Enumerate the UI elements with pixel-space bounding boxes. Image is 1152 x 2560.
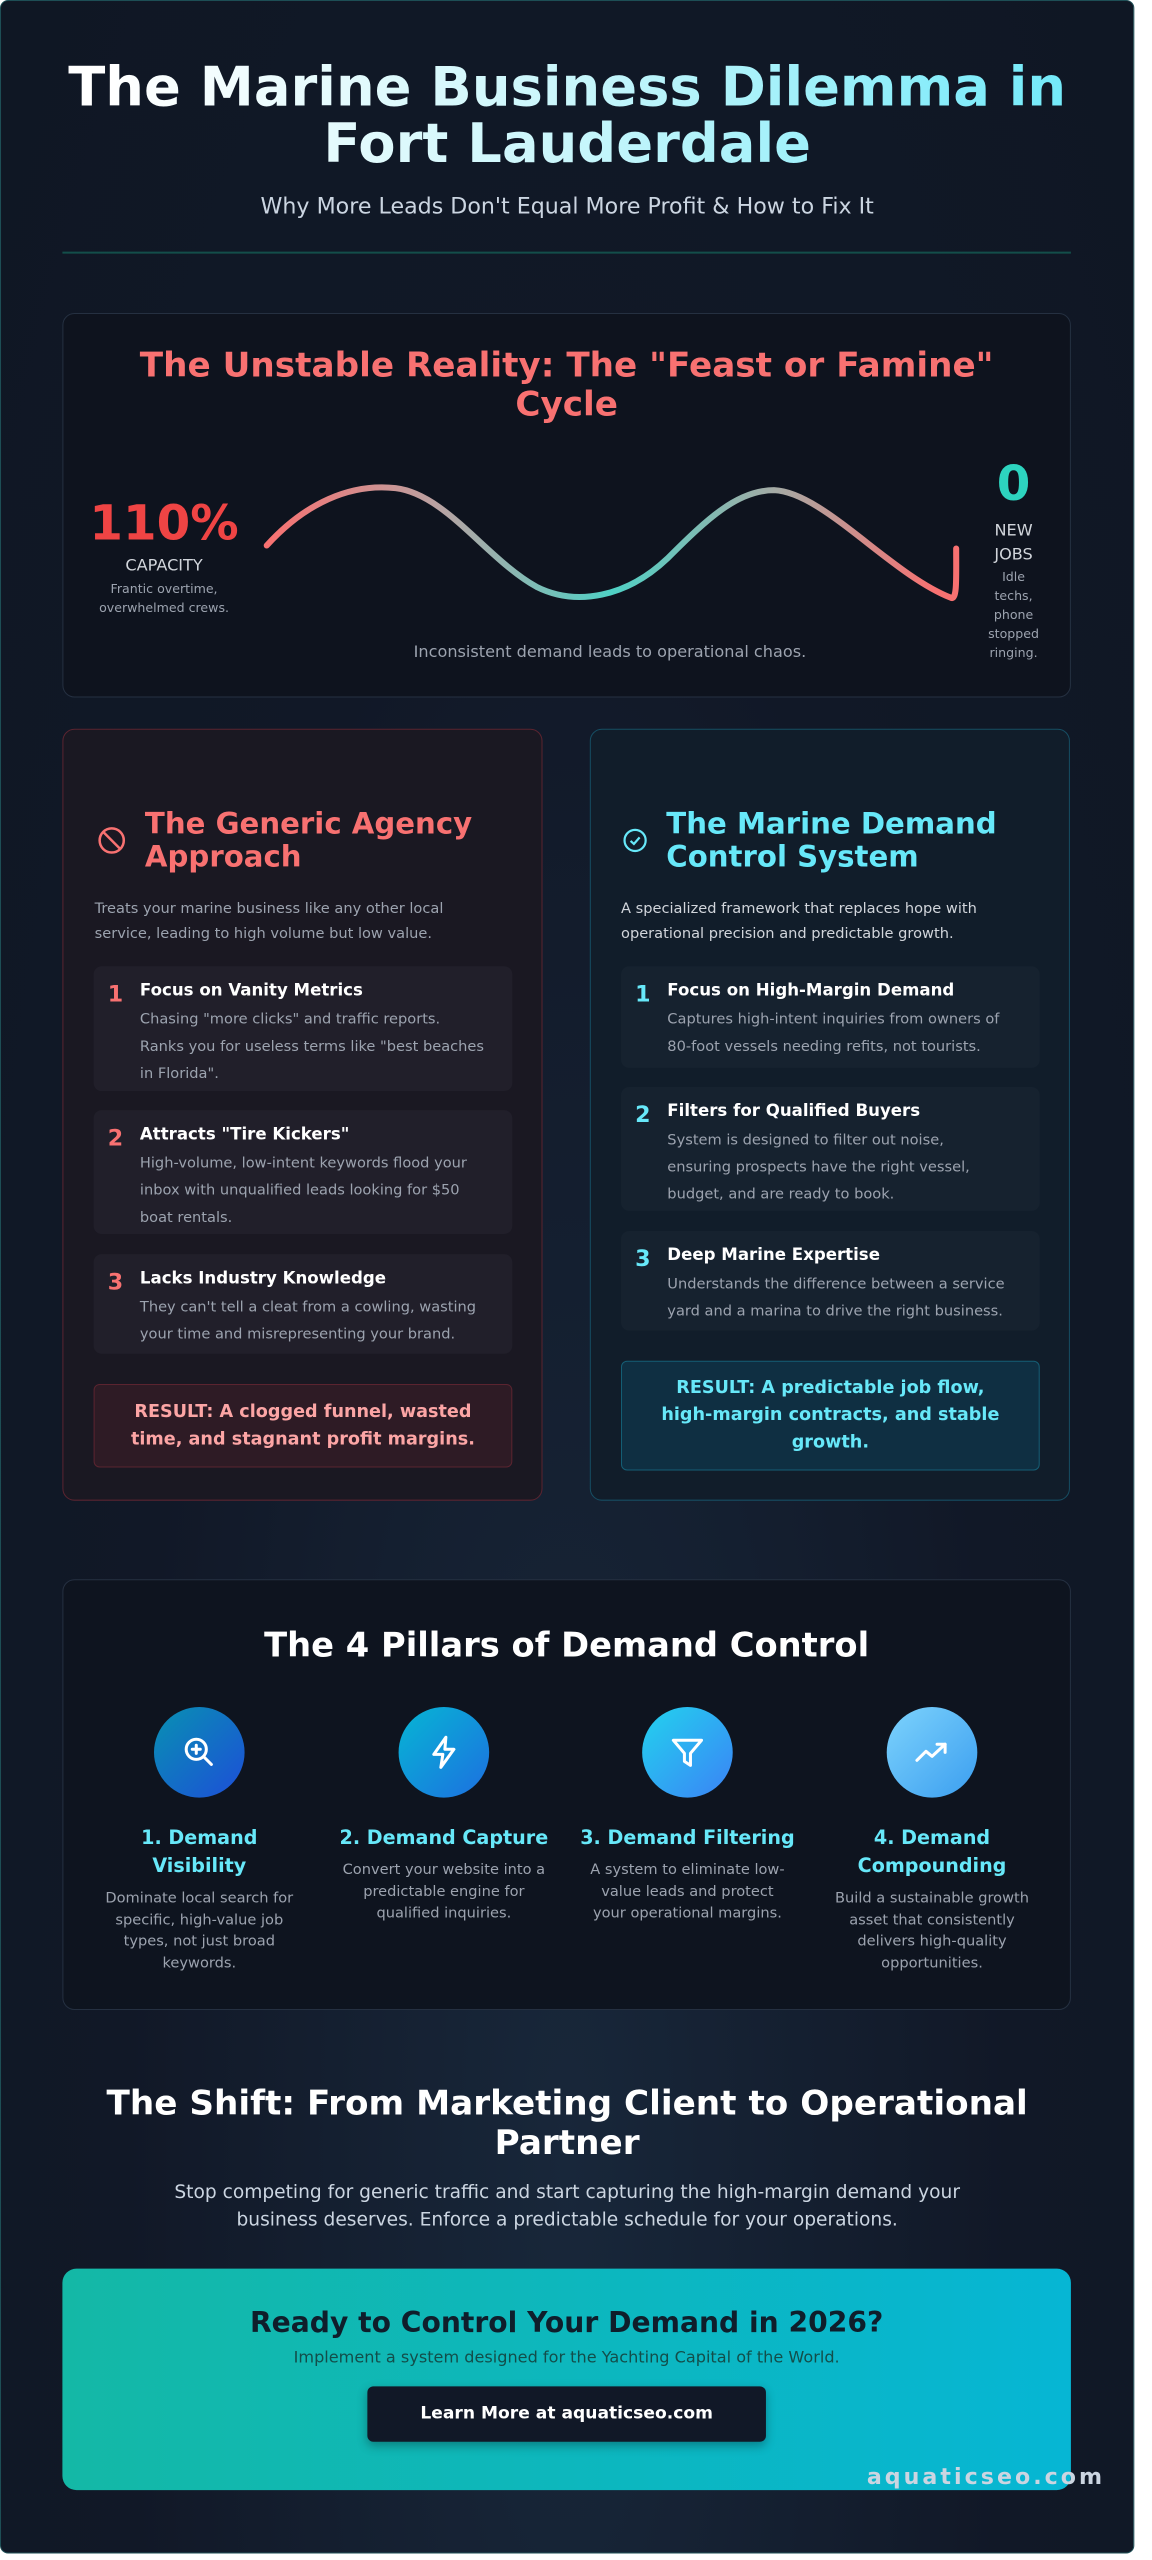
CTA heading: Ready to Control Your Demand in 2026? [250, 2306, 883, 2339]
stat: 0 new jobs: phone [994, 607, 1033, 622]
stat: 0 new jobs: Idle [1002, 569, 1025, 584]
panel: feast or famine [62, 313, 1071, 698]
item 3: Understands the difference between a service yard and a marina to drive the right business. [667, 1276, 1005, 1320]
panel: generic agency [62, 729, 543, 1501]
item 1: 1 [108, 982, 123, 1008]
item 1: 1 [635, 982, 651, 1008]
item 1: Focus on High-Margin Demand [667, 980, 954, 999]
item 3: Deep Marine Expertise [667, 1245, 880, 1264]
item 3 [94, 1254, 512, 1354]
pillar 4: 4. Demand [874, 1827, 990, 1849]
icon: trend [887, 1707, 977, 1798]
item 3: Lacks Industry Knowledge [140, 1268, 386, 1287]
stat: 110%: 110% [89, 495, 239, 552]
heading: Approach [145, 839, 302, 874]
item 1: Chasing "more clicks" and traffic reports. Ranks you for useless terms like "best beaches in Florida". [140, 1012, 484, 1082]
item 2: Attracts "Tire Kickers" [140, 1124, 349, 1143]
icon: ban [98, 827, 126, 854]
stat: 0 new jobs: techs, [994, 588, 1033, 603]
title [0, 59, 1134, 172]
heading [145, 806, 472, 874]
item 2: High-volume, low-intent keywords flood your inbox with unqualified leads looking for $50 boat rentals. [140, 1155, 467, 1226]
stat: 110%: CAPACITY [125, 556, 203, 575]
result [621, 1361, 1040, 1470]
pillar 2 [340, 1707, 548, 1921]
item 2: Filters for Qualified Buyers [667, 1101, 920, 1120]
item 3: 3 [635, 1247, 651, 1272]
icon: check [623, 828, 647, 852]
heading: The Unstable Reality: The "Feast or Famine" Cycle [140, 345, 993, 425]
stat: 110%: Frantic overtime, [111, 581, 218, 596]
pillar 3 [580, 1707, 795, 1921]
item 3: 3 [108, 1270, 123, 1295]
item 1 [621, 966, 1040, 1068]
heading: The Generic Agency [145, 806, 472, 840]
item 3 [621, 1231, 1040, 1331]
heading: The 4 Pillars of Demand Control [264, 1625, 869, 1665]
item 1: Focus on Vanity Metrics [140, 980, 363, 999]
subtitle: Why More Leads Don't Equal More Profit & How to Fix It [260, 194, 874, 219]
stat: 0 new jobs: JOBS [994, 545, 1033, 564]
CTA button: Learn More at aquaticseo.com [420, 2404, 713, 2424]
pillar 1: Visibility [152, 1855, 246, 1877]
heading [666, 806, 997, 874]
stat: 0 new jobs: stopped [988, 626, 1039, 641]
shift heading: The Shift: From Marketing Client to Operational Partner [107, 2083, 1028, 2163]
heading: The Marine Demand [666, 806, 997, 840]
panel: 4 pillars [62, 1579, 1071, 2010]
icon: bolt [399, 1707, 489, 1798]
item 2: 2 [635, 1103, 651, 1128]
CTA box [62, 2269, 1071, 2490]
result: RESULT: A predictable job flow, high-margin contracts, and stable growth. [661, 1378, 999, 1452]
heading: Control System [666, 839, 919, 874]
CTA sub: Implement a system designed for the Yachting Capital of the World. [294, 2347, 840, 2366]
pillar 4 [835, 1707, 1029, 1971]
pillar 4: Build a sustainable growth asset that consistently delivers high-quality opportunities. [835, 1890, 1029, 1971]
icon: search [154, 1707, 245, 1798]
pillar 3: 3. Demand Filtering [580, 1827, 795, 1849]
footer brand: aquaticseo.com [867, 2465, 1105, 2490]
icon: funnel [642, 1707, 733, 1798]
item 2: System is designed to filter out noise, ensuring prospects have the right vessel, budget, and are ready to book. [667, 1132, 970, 1203]
panel: marine demand control [590, 729, 1070, 1501]
description: A specialized framework that replaces hope with operational precision and predictable growth. [621, 901, 977, 942]
item 1: Captures high-intent inquiries from owners of 80-foot vessels needing refits, not tourists. [667, 1012, 999, 1055]
item 3: They can't tell a cleat from a cowling, wasting your time and misrepresenting your brand. [140, 1299, 476, 1343]
stat: 110% [89, 495, 239, 615]
stat: 0 new jobs: NEW [994, 520, 1033, 539]
pillar 2: Convert your website into a predictable engine for qualified inquiries. [343, 1862, 545, 1921]
caption: Inconsistent demand leads to operational chaos. [414, 642, 806, 661]
stat: 0 new jobs: ringing. [989, 645, 1038, 660]
item 2 [94, 1110, 512, 1234]
CTA button [367, 2386, 766, 2442]
title: The Marine Business Dilemma in [68, 55, 1066, 119]
item 2 [621, 1087, 1040, 1211]
pillar 1: Dominate local search for specific, high-value job types, not just broad keywords. [105, 1890, 293, 1971]
stat: 0 new jobs [988, 456, 1039, 660]
stat: 0 new jobs: 0 [997, 456, 1030, 512]
item 1 [94, 966, 512, 1091]
shift paragraph: Stop competing for generic traffic and start capturing the high-margin demand your business deserves. Enforce a predictable schedule for your operations. [174, 2182, 960, 2230]
result [94, 1384, 512, 1467]
pillar 2: 2. Demand Capture [340, 1827, 548, 1849]
title: Fort Lauderdale [323, 112, 811, 175]
pillar 3: A system to eliminate low-value leads and protect your operational margins. [590, 1862, 785, 1921]
pillar 1 [105, 1707, 294, 1971]
pillar 4: Compounding [858, 1855, 1006, 1877]
pillar 1: 1. Demand [141, 1827, 257, 1849]
item 2: 2 [108, 1126, 123, 1151]
description: Treats your marine business like any other local service, leading to high volume but low value. [95, 901, 443, 942]
result: RESULT: A clogged funnel, wasted time, and stagnant profit margins. [131, 1402, 475, 1449]
chart: wave [264, 484, 960, 602]
stat: 110%: overwhelmed crews. [99, 600, 229, 615]
